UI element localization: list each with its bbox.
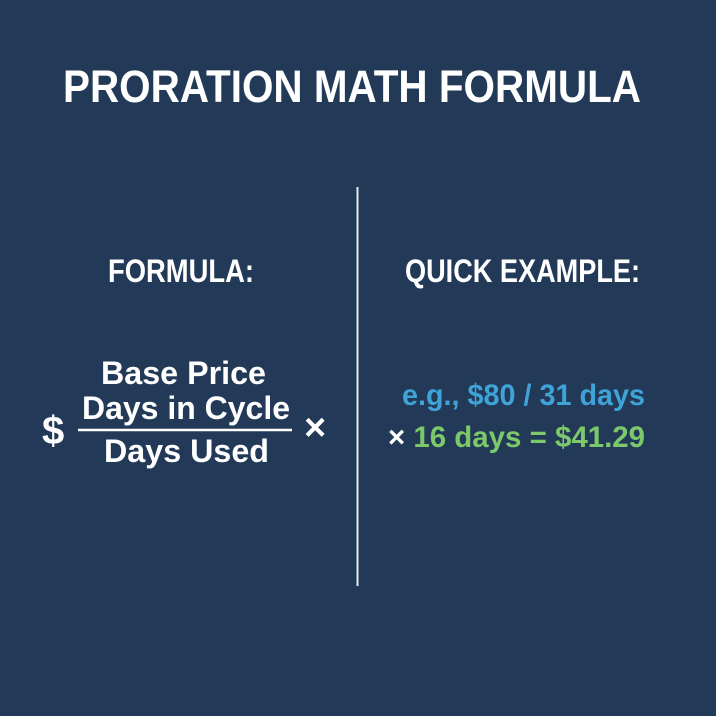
heading: formula: FORMULA: — [108, 253, 254, 289]
multiply sign: × — [304, 407, 326, 449]
numerator: base price: Base Price — [101, 355, 266, 391]
dollar sign: $ — [42, 409, 64, 453]
heading: quick example: QUICK EXAMPLE: — [405, 253, 640, 289]
example line 1: e.g., $80 / 31 days — [402, 379, 645, 412]
divider — [356, 187, 358, 586]
example line 2: × 16 days = $41.29 — [388, 421, 645, 454]
example — [388, 379, 645, 454]
denominator: days used: Days Used — [104, 433, 269, 469]
numerator: days in cycle: Days in Cycle — [82, 390, 290, 426]
formula — [42, 355, 326, 469]
title: PRORATION MATH FORMULA — [63, 61, 641, 112]
